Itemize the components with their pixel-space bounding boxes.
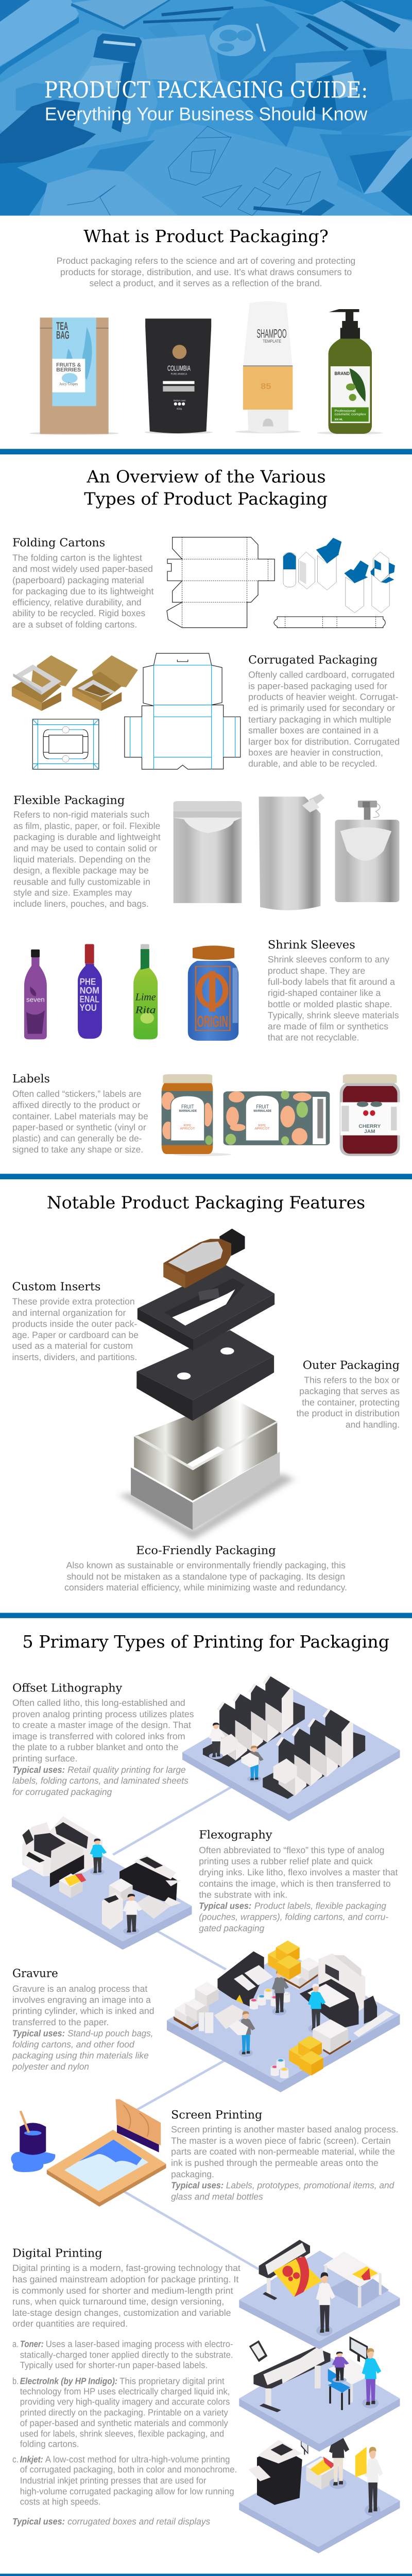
text: digital printing: order quantities are required. [12,2318,128,2329]
heading: folding cartons: Folding Cartons [12,536,105,549]
flat label sheet: RIPE [259,1124,266,1127]
foam insert [138,1265,274,1350]
text: custom inserts: used as a material for custom [12,1341,133,1351]
panel: offset lithography [12,1675,400,1821]
floor 3: copier and reviewers [239,2425,400,2553]
olive pump bottle: BRAND [334,371,350,376]
heading: flexible packaging: Flexible Packaging [13,794,125,807]
list item c: inkjet: Industrial inkjet printing presses that are used for [20,2475,207,2485]
text: flexography [199,1845,398,1933]
list item b: electroink: This proprietary digital print [119,2376,225,2386]
floor 2: large plotter and designers [239,2336,400,2452]
flat label sheet: MARMALADE [253,1109,271,1112]
text: folding cartons: (paperboard) packaging material [12,575,144,585]
text: folding cartons: The folding carton is the lightest [12,552,142,563]
text: shrink sleeves: that are not recyclable. [268,1032,359,1042]
heading: flexography: Flexography [199,1828,272,1841]
heading: labels: Labels [12,1072,50,1086]
text: gravure: Stand-up pouch bags, [67,2028,153,2038]
intro text: select a product, and it serves as a reflection of the brand. [89,278,322,288]
kraft boxes with inserts [12,655,138,711]
typical uses [12,2516,210,2527]
text: folding cartons [12,552,154,630]
illustration: screen frame and ink [11,2099,166,2207]
apricot jar: RIPE [184,1124,191,1127]
shrink sleeve bottles: PHE [80,977,96,987]
text: offset lithography: printing surface. [12,1753,78,1764]
text: gravure: printing cylinder, which is inked and [12,2006,154,2016]
list item b: electroink: ElectroInk (by HP Indigo): [20,2376,117,2386]
text: eco-friendly [64,1560,347,1592]
apricot jar: MARMALADE [179,1109,197,1112]
kraft tea bag [29,317,119,435]
text: flexible packaging: packaging is durable and lightweight [13,832,161,842]
text: labels: paper-based or synthetic (vinyl or [12,1122,146,1132]
typical uses: Typical uses: [12,2516,65,2527]
list item b: electroink: b. [12,2376,19,2386]
list item b: electroink [12,2376,230,2449]
text: folding cartons: efficiency, relative durability, and [12,597,141,607]
text: flexible packaging: design, a flexible package may be [13,865,149,875]
divider bar [0,449,412,454]
shampoo tube: 85 [261,381,271,391]
text: gravure: Gravure is an analog process that [12,1984,147,1994]
product photos row [29,301,383,435]
panel: corrugated packaging [12,653,400,769]
panel: flexible packaging [13,794,400,910]
text: gravure: packaging using thin materials like [12,2050,149,2060]
list item c: inkjet: c. [12,2454,19,2464]
heading: screen printing: Screen Printing [171,2108,262,2121]
text: shrink sleeves [268,954,399,1042]
heading: shrink sleeves: Shrink Sleeves [268,938,355,951]
text: shrink sleeves: product shape. They are [268,965,365,976]
heading: overview: Types of Product Packaging [84,489,328,509]
list item a: toner: statically-charged toner applied directly to the substrate. [20,2349,233,2360]
list item a: toner: Uses a laser-based imaging process with electro- [46,2338,233,2349]
list item b: electroink: printed directly on the packaging. Printable on a variety [20,2408,228,2417]
section: notable features [0,1174,412,1592]
text: gravure: Typical uses: [12,2028,65,2038]
cherry jam jar [340,1074,400,1156]
insert dieline [32,719,99,769]
callout: custom inserts [12,1280,139,1362]
text: screen printing: Typical uses: [171,2180,224,2190]
list item b: electroink: providing very high-quality imagery and accurate colors [20,2397,230,2406]
apricot jar: APRICOT [180,1127,195,1130]
carton dieline [167,537,274,628]
illustration: gravure floor [167,1940,400,2092]
text: gravure: involves engraving an image into a [12,1994,151,2005]
floor 1: plotter and poster [239,2240,400,2349]
exploded package illustration [119,1229,294,1540]
text: offset lithography: Typical uses: [12,1765,65,1775]
corrugated box dieline [125,653,241,769]
text: offset lithography: Retail quality printing for large [67,1765,186,1775]
shampoo tube: SHAMPOO [256,327,287,341]
text: labels: signed to take any shape or size. [12,1144,143,1155]
divider bar [0,2574,412,2576]
hero photo background [0,0,412,216]
text: digital printing: has gained mainstream adoption for package printing. It [12,2274,238,2284]
kraft tea bag: TEA [56,320,68,332]
panel: screen printing [11,2099,398,2207]
text: screen printing: packaging. [171,2169,214,2179]
text: digital printing: Digital printing is a modern, fast-growing technology that [12,2263,241,2273]
text: labels: plastic) and can generally be de- [12,1133,142,1143]
text: custom inserts: age. Paper or cardboard can be [12,1330,139,1340]
list item b: electroink: used for labels, shrink sleeves, flexible packaging, and [20,2429,224,2438]
divider and heading [0,1174,412,1213]
typical uses: corrugated boxes and retail displays [67,2516,210,2527]
connectors between platforms [113,1787,259,2269]
shrink sleeve bottles: NOM [80,985,99,996]
illustration: flexo press floor [12,1816,192,1950]
cherry jam jar: CHERRY [358,1124,381,1129]
heading: eco-friendly: Eco-Friendly Packaging [136,1544,276,1557]
text: offset lithography: for corrugated packaging [12,1787,112,1797]
floor shadow [119,1473,294,1540]
list item c: inkjet: high-volume corrugated packaging allow for low running [20,2486,234,2496]
panel: folding cartons [12,536,395,630]
isometric carton boxes [283,538,395,613]
heading: overview: An Overview of the Various [87,467,326,487]
divider and heading [0,1613,412,1652]
shrink sleeve bottles: Lime [135,991,156,1003]
heading: what is product packaging: What is Product Packaging? [83,227,329,246]
panel: shrink sleeves [24,938,399,1042]
heading: custom inserts: Custom Inserts [12,1280,100,1293]
section: putting your idea together [0,2574,412,2576]
text: custom inserts: products inside the outer pack- [12,1318,137,1329]
heading: digital printing: Digital Printing [12,2247,102,2260]
list item b: electroink: technology from HP uses electrically charged liquid ink, [20,2386,230,2397]
heading: overview [84,467,328,509]
olive pump bottle: Professional [334,409,355,413]
text: digital printing: runs, when quick turnaround time, design versioning, [12,2296,224,2307]
cherry jam jar: JAM [364,1129,375,1134]
list item c: inkjet: Inkjet: [20,2454,43,2464]
olive pump bottle: cosmetic complex [334,412,366,416]
list item a: toner: Typically used for shorter-run paper-based labels. [20,2360,208,2370]
panel: labels [12,1072,400,1156]
callout: eco-friendly packaging [64,1544,347,1592]
intro text [57,256,355,288]
text: gravure [12,1984,154,2072]
shrink sleeve bottles [24,944,158,1039]
text: flexible packaging: reusable and fully customizable in [13,876,150,887]
section: overview of packaging types [0,449,412,630]
text: labels [12,1089,148,1155]
black coffee pouch: 450g [177,408,182,410]
text: flexible packaging: as film, plastic, paper, or foil. Flexible [13,821,160,831]
list item a: toner [12,2338,233,2370]
text: labels: affixed directly to the product or [12,1099,140,1110]
metallic liner [134,1398,277,1501]
list item c: inkjet: costs at high speeds. [20,2497,100,2506]
shampoo tube [235,301,301,433]
list item c: inkjet: A low-cost method for ultra-high-volume printing [45,2454,230,2464]
flat label sheet: APRICOT [254,1127,269,1130]
black coffee pouch: PURE ARABICA [171,372,187,376]
text: digital printing: is commonly used for shorter and medium-length print [12,2285,233,2296]
apricot jar [162,1074,231,1156]
shampoo tube: TEMPLATE [263,338,281,344]
text: flexible packaging: liquid materials. Depending on the [13,854,150,865]
list item b: electroink: of paper-based and synthetic materials and commonly [20,2418,228,2428]
kraft tea bag: Juicy Grapes [59,382,78,386]
list item a: toner: a. [12,2338,19,2349]
olive pump bottle: 300 ML [334,418,343,421]
text: labels: Often called “stickers,” labels are [12,1089,141,1099]
text: outer packaging [297,1375,400,1430]
black coffee pouch [145,318,213,434]
text: custom inserts [12,1296,139,1362]
text: digital printing [12,2263,241,2329]
text: flexible packaging: include liners, pouches, and bags. [13,899,149,909]
kraft tea bag: BAG [56,329,70,341]
shrink sleeve bottles: YOU [80,1003,97,1013]
text: offset lithography: labels, folding cartons, and laminated sheets [12,1775,188,1786]
illustration: offset press floor [182,1675,400,1821]
text: labels: container. Label materials may be [12,1111,148,1121]
brown bottle [163,1229,245,1288]
text: gravure: transferred to the paper. [12,2017,109,2027]
callout: outer packaging [297,1359,400,1430]
text: flexography: the substrate with ink. [199,1889,287,1900]
kraft tea bag: BERRIES [56,367,81,372]
text: folding cartons: are a subset of folding cartons. [12,619,137,630]
text: screen printing: glass and metal bottles [171,2191,263,2201]
text: gravure: folding cartons, and other food [12,2039,134,2049]
text: offset lithography: to create a master image of the design. That [12,1720,191,1730]
text: corrugated packaging [248,669,400,769]
panel: digital printing [12,2240,400,2553]
text: flexible packaging: style and size. Examples may [13,887,132,897]
text: folding cartons: and most widely used paper-based [12,564,153,574]
text: flexible packaging: and may be used to contain solid or [13,843,157,853]
list item b: electroink: folding cartons. [20,2438,79,2449]
illustration: digital print floors [239,2240,400,2553]
second carton dieline [274,617,385,628]
panel: gravure [12,1940,400,2092]
text: gravure: polyester and nylon [12,2061,89,2072]
olive pump bottle [317,309,383,434]
text: flexography: Typical uses: [199,1901,251,1911]
section: printing types [0,1613,412,2553]
shrink sleeve bottles: seven [26,996,45,1004]
list item a: toner: Toner: [20,2338,44,2349]
heading: offset lithography: Offset Lithography [12,1682,123,1694]
text: folding cartons: ability to be recycled. Rigid boxes [12,608,145,618]
list item c: inkjet [12,2454,237,2506]
apricot jar: FRUIT [181,1104,194,1110]
flat label sheet: FRUIT [256,1104,269,1110]
text: folding cartons: for packaging due to its lightweight [12,586,154,596]
text: flexible packaging: Refers to non-rigid materials such [13,809,149,820]
text: screen printing [171,2124,398,2201]
panel: flexography [12,1816,398,1950]
text: offset lithography [12,1698,194,1797]
text: offset lithography: Often called litho, this long-established and [12,1698,185,1708]
text: flexography: gated packaging [199,1923,264,1933]
blue origin jar [188,945,238,1041]
shrink sleeve bottles: Rita [135,1004,156,1015]
text: offset lithography: the plate to a rubber blanket and onto the [12,1742,178,1752]
hero banner [0,0,412,216]
shrink sleeve bottles: ENAL [80,994,99,1005]
text: custom inserts: These provide extra protection [12,1296,135,1307]
text: digital printing: late-stage design changes, customization and variable [12,2308,231,2318]
flat label sheet [224,1091,330,1145]
list item c: inkjet: of corrugated packaging, both in color and monochrome. [20,2464,237,2475]
text: flexible packaging [13,809,161,909]
text: offset lithography: proven analog printing process utilizes plates [12,1709,194,1719]
black coffee pouch: COLUMBIA [167,364,191,372]
text: custom inserts: inserts, dividers, and partitions. [12,1352,137,1362]
blue origin jar: ORIGIN [197,1013,228,1030]
black coffee pouch: Medium roast [174,399,185,402]
section: what is product packaging [29,227,383,435]
silver pouches [174,794,400,910]
outer white box [131,1452,280,1530]
text: custom inserts: and internal organization for [12,1308,126,1318]
text: offset lithography: image is transferred with colored inks from [12,1731,185,1741]
kraft tea bag: FRUITS & [56,362,81,368]
black lid tray [136,1330,274,1421]
heading: gravure: Gravure [12,1967,58,1980]
